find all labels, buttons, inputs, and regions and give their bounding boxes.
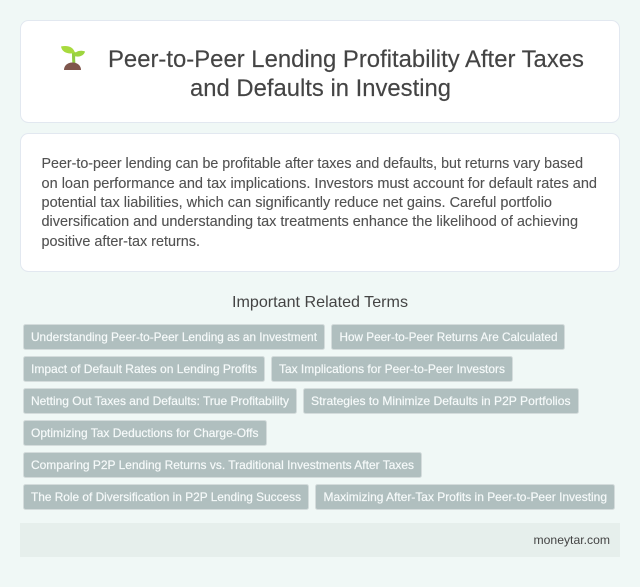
tag: Strategies to Minimize Defaults in P2P Portfolios	[311, 394, 570, 408]
tag	[332, 324, 564, 350]
tag	[24, 420, 266, 446]
panel: header	[20, 20, 620, 122]
summary text: Peer-to-peer lending can be profitable after taxes and defaults, but returns vary based	[42, 156, 583, 172]
tag	[272, 356, 512, 382]
tag: The Role of Diversification in P2P Lending Success	[31, 490, 301, 504]
tag: Tax Implications for Peer-to-Peer Investors	[279, 362, 505, 376]
summary text: diversification and understanding tax treatments enhance the likelihood of achieving	[42, 214, 578, 230]
tag: Netting Out Taxes and Defaults: True Profitability	[31, 394, 289, 408]
tag: Comparing P2P Lending Returns vs. Traditional Investments After Taxes	[31, 458, 414, 472]
tag	[24, 324, 324, 350]
tag: Optimizing Tax Deductions for Charge-Offs	[31, 426, 258, 440]
tag	[24, 356, 264, 382]
footer	[20, 523, 620, 557]
summary text	[42, 156, 597, 250]
tag: Impact of Default Rates on Lending Profits	[31, 362, 257, 376]
title: and Defaults in Investing	[190, 75, 451, 102]
tag	[304, 388, 578, 414]
panel: summary	[20, 134, 620, 272]
title	[108, 46, 584, 102]
tag	[24, 388, 296, 414]
title: Peer-to-Peer Lending Profitability After Taxes	[108, 46, 584, 73]
tag: Maximizing After-Tax Profits in Peer-to-Peer Investing	[324, 490, 607, 504]
footer source text: moneytar.com	[534, 533, 610, 547]
tag: Understanding Peer-to-Peer Lending as an Investment	[31, 330, 318, 344]
heading: important related terms: Important Related Terms	[232, 294, 408, 311]
icon: sprout	[61, 46, 85, 70]
tag list	[24, 324, 614, 510]
tag: How Peer-to-Peer Returns Are Calculated	[340, 330, 558, 344]
tag	[24, 484, 308, 510]
summary text: positive after-tax returns.	[42, 234, 200, 250]
summary text: potential tax liabilities, which can significantly reduce net gains. Careful portfolio	[42, 195, 552, 211]
summary text: on loan performance and tax implications. Investors must account for default rates and	[42, 176, 597, 192]
tag	[316, 484, 614, 510]
tag	[24, 452, 422, 478]
